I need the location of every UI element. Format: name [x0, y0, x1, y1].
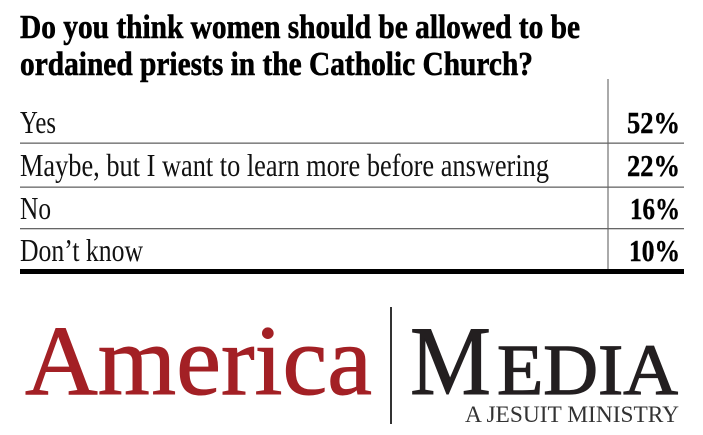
logo wordmark: Media small caps: EDIA — [497, 330, 678, 410]
title: ordained priests in the Catholic Church? — [20, 46, 533, 83]
title: Do you think women should be allowed to be — [20, 9, 580, 46]
row: yes: 52% — [627, 105, 680, 140]
row: yes — [20, 104, 680, 140]
row: don't know: Don’t know — [20, 232, 143, 268]
logo: America Media — [25, 305, 679, 427]
row: no: No — [20, 190, 51, 226]
row: yes: Yes — [20, 104, 56, 140]
logo wordmark: America: America — [25, 305, 372, 416]
logo wordmark: Media M: M — [410, 307, 491, 416]
title — [20, 9, 580, 83]
row: don't know — [20, 232, 680, 268]
row: maybe: Maybe, but I want to learn more before answering — [20, 147, 549, 183]
table — [20, 79, 684, 274]
logo tagline: A JESUIT MINISTRY — [465, 402, 679, 427]
row: no: 16% — [630, 191, 680, 226]
row: don't know: 10% — [629, 233, 680, 268]
row: no — [20, 190, 680, 226]
row: maybe: 22% — [627, 148, 680, 183]
